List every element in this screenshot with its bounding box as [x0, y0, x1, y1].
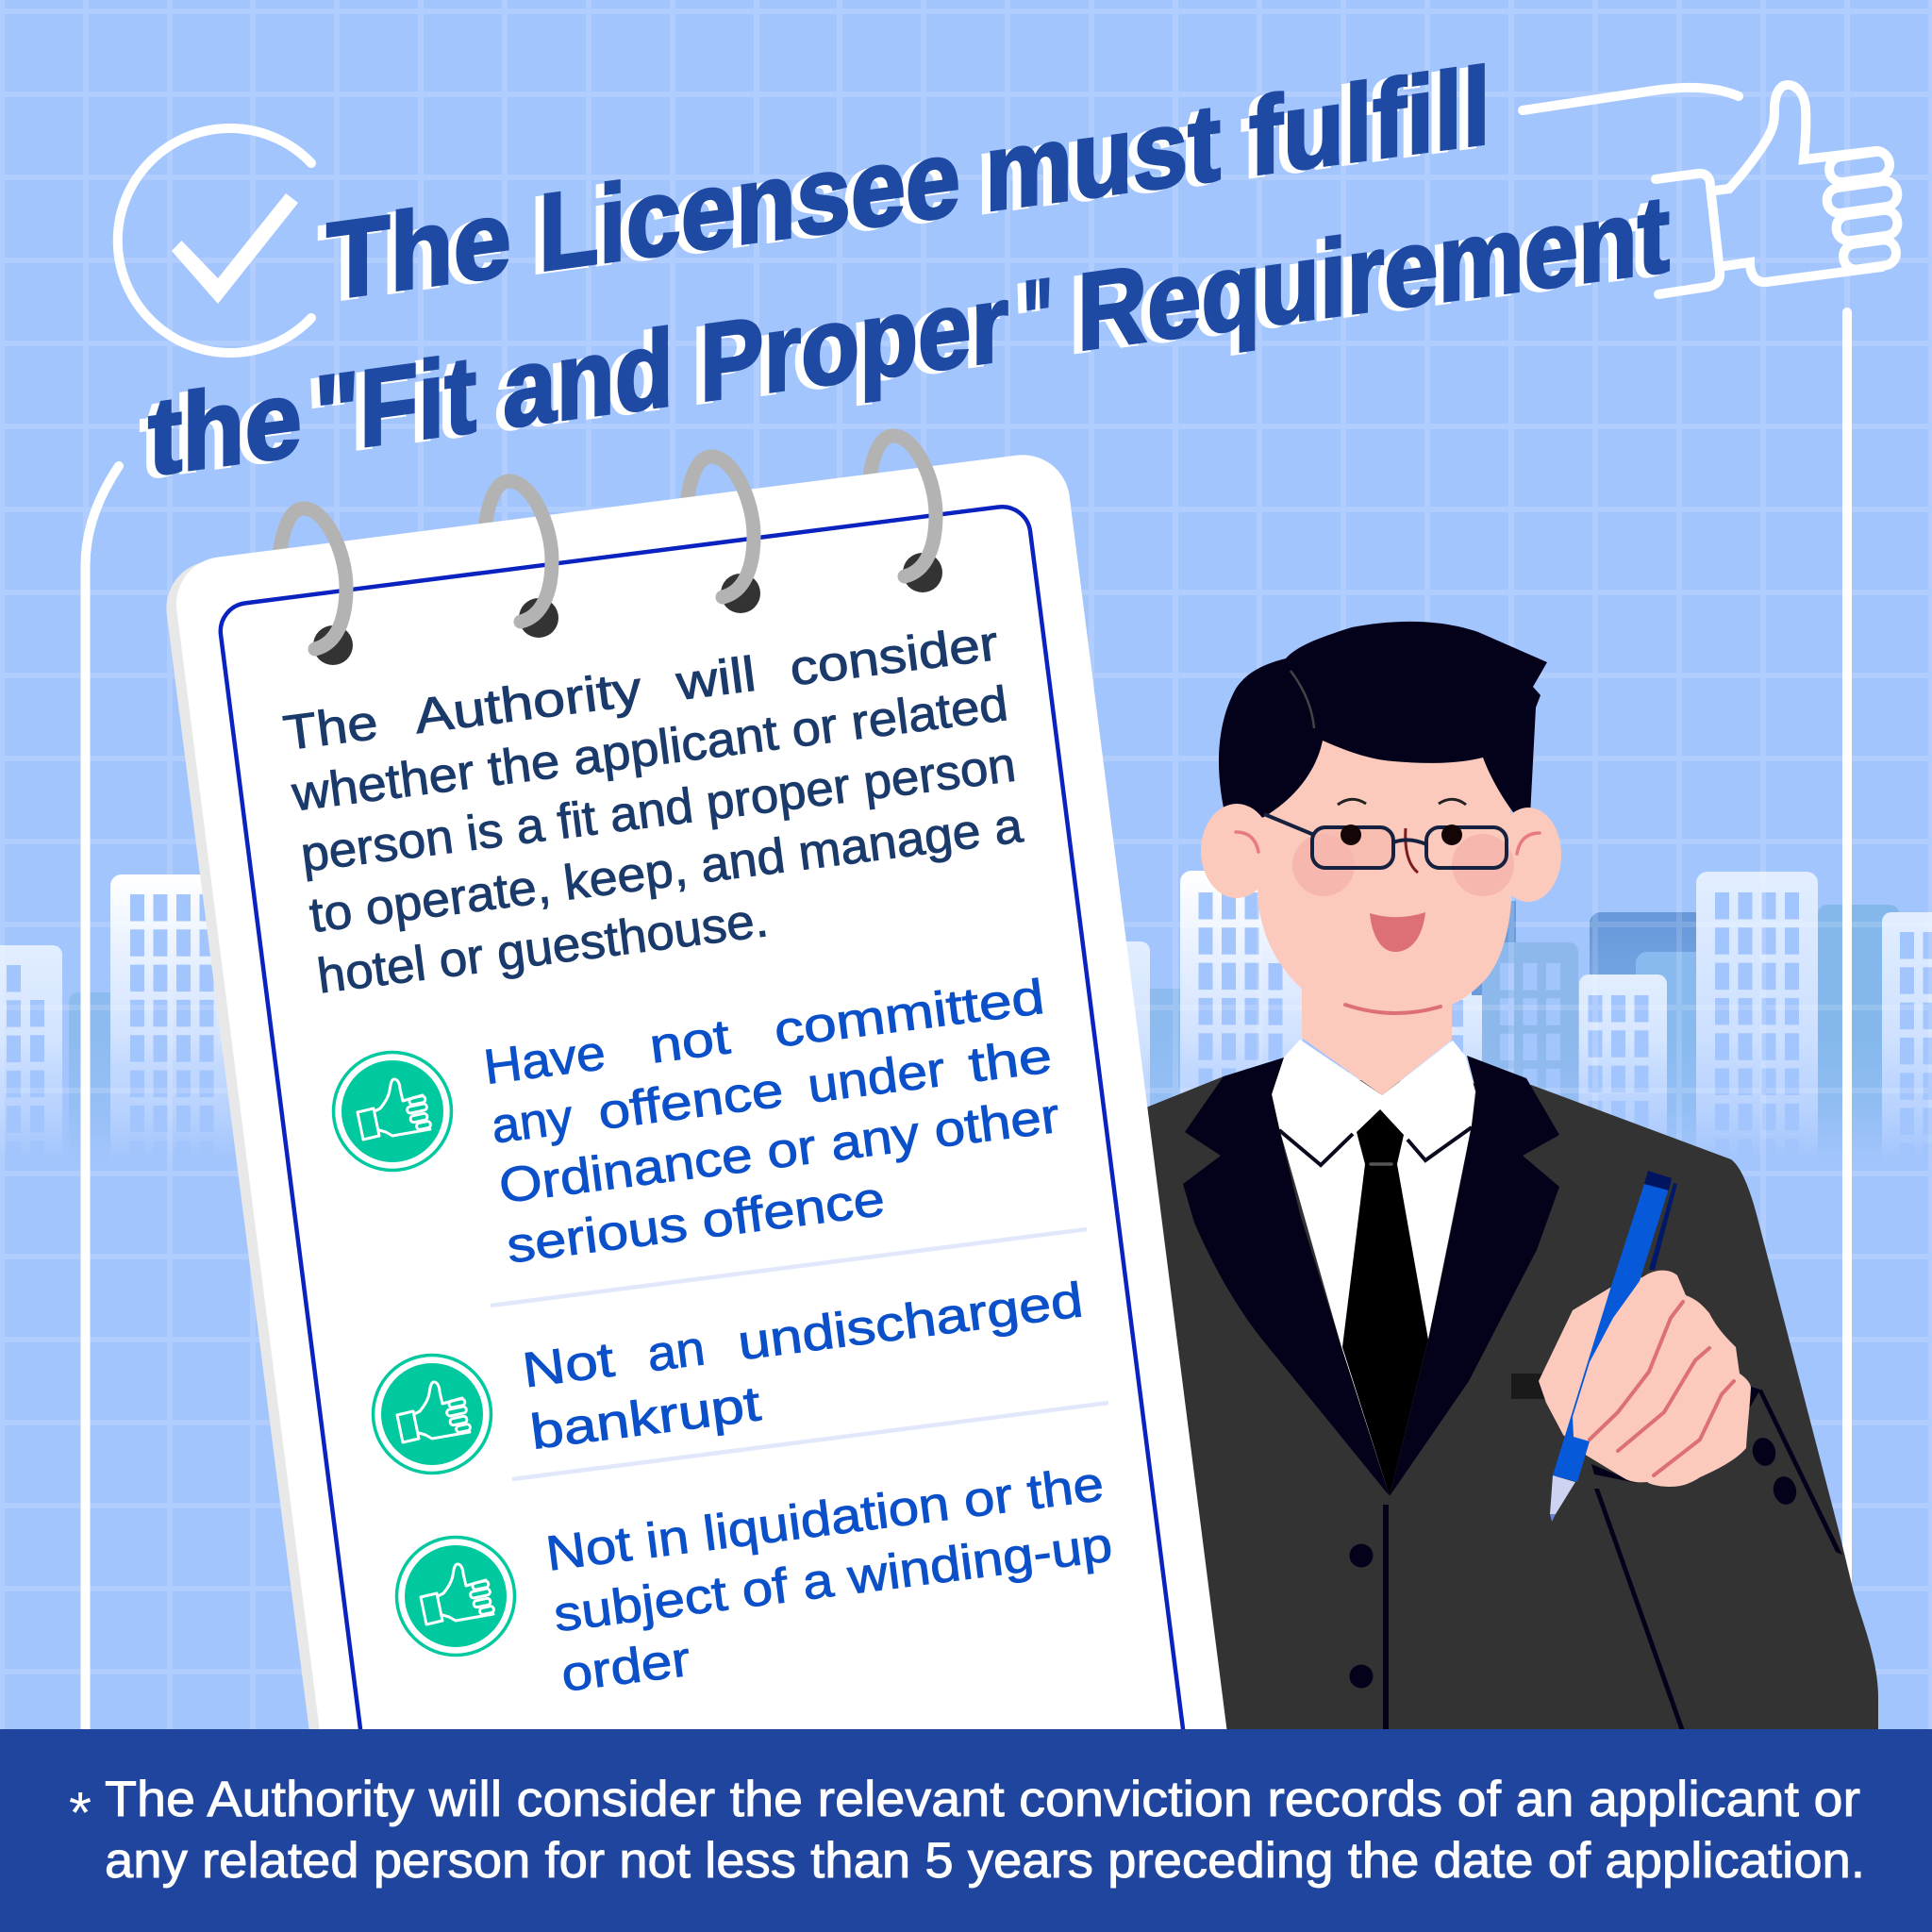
icon: check mark in circle [118, 128, 311, 353]
city skyline [0, 871, 1932, 1140]
left lapel [1183, 1058, 1390, 1496]
title: must [976, 84, 1212, 238]
hand [1539, 1271, 1751, 1487]
tie [1342, 1109, 1428, 1496]
item: no offence: any [489, 1090, 575, 1154]
item: not bankrupt: undischarged [735, 1273, 1086, 1371]
item: no offence: under [805, 1042, 948, 1114]
hair highlight [1291, 671, 1314, 728]
item: no offence: the [966, 1028, 1055, 1093]
right lapel [1390, 1056, 1559, 1496]
intro paragraph: to operate, keep, and manage a [307, 798, 1025, 943]
footer band [0, 1729, 1932, 1932]
item: not in liquidation [543, 1457, 1123, 1703]
item: no offence: Have [481, 1025, 608, 1095]
title: Licensee [530, 119, 952, 297]
title: Requirement [1077, 172, 1670, 374]
eyebrows [1338, 799, 1466, 805]
divider lines [491, 1229, 1108, 1479]
pen [1550, 1171, 1677, 1522]
ring 3 [711, 457, 760, 613]
title: The [318, 179, 503, 326]
title: " [1014, 258, 1044, 384]
intro paragraph: The [280, 695, 381, 761]
white frame lines [85, 312, 1847, 1736]
title: fulfill [1241, 47, 1482, 202]
item: not bankrupt [520, 1273, 1094, 1460]
item: no offence: not [646, 1009, 734, 1074]
finger lines [1590, 1302, 1734, 1475]
page shadow [160, 508, 798, 1896]
ring 2 [509, 481, 558, 638]
person [1113, 622, 1878, 1736]
intro paragraph: person is a fit and proper person [298, 738, 1019, 883]
intro paragraph [280, 616, 1034, 1005]
ring 1 [304, 508, 353, 665]
icon: thumbs up badge 3 [396, 1538, 515, 1655]
chin line [1345, 1005, 1441, 1013]
title: the [148, 356, 302, 499]
item: not in liquidation: subject of a winding-up [551, 1517, 1115, 1642]
ring 4 [893, 436, 942, 592]
item: no offence: Ordinance or any other [496, 1089, 1062, 1214]
title: the [140, 359, 293, 502]
icon: thumbs up badge 2 [374, 1355, 491, 1474]
nose [1406, 828, 1418, 873]
footnote: The Authority will consider the relevant conviction records of an applicant or [105, 1772, 1860, 1827]
intro paragraph: will [673, 647, 759, 711]
intro paragraph: hotel or guesthouse. [314, 892, 772, 1005]
item: not in liquidation: Not in liquidation or the [543, 1457, 1107, 1582]
notepad [160, 449, 1237, 1924]
hair [1219, 622, 1547, 821]
title [140, 44, 1670, 502]
item: no offence: committed [771, 970, 1047, 1058]
item: no offence [481, 970, 1070, 1274]
footnote [69, 1772, 1865, 1889]
item: no offence: serious offence [504, 1172, 888, 1274]
glasses [1264, 814, 1507, 868]
title: must [985, 80, 1221, 234]
spiral rings: front halves over the page [304, 436, 942, 665]
breast pocket [1511, 1374, 1549, 1399]
ears [1201, 804, 1561, 902]
title: " [1023, 255, 1053, 381]
item: no offence: offence [595, 1063, 787, 1141]
page [171, 449, 1233, 1892]
face and neck [1257, 717, 1511, 1095]
item: not in liquidation: order [558, 1632, 693, 1703]
intro paragraph: whether the applicant or related [288, 676, 1011, 823]
intro paragraph: consider [787, 616, 1001, 697]
footnote: any related person for not less than 5 years preceding the date of application. [105, 1833, 1865, 1889]
title: Licensee [539, 116, 960, 294]
page inner border [217, 504, 1193, 1917]
jacket [1113, 1076, 1878, 1736]
title: The [326, 176, 511, 323]
icon: large thumbs up outline [1523, 85, 1899, 294]
tie clip [1371, 1162, 1391, 1166]
item: not bankrupt: Not [520, 1333, 618, 1398]
icon: thumbs up badge 1 [334, 1053, 451, 1170]
eyes [1341, 824, 1462, 845]
collar lines [1279, 1127, 1472, 1165]
ear lines [1236, 832, 1540, 854]
title: Requirement [1069, 175, 1661, 376]
footnote: * [69, 1781, 92, 1846]
cheek blush [1292, 834, 1514, 896]
intro paragraph: Authority [411, 661, 645, 744]
item: not bankrupt: bankrupt [527, 1376, 764, 1460]
spiral rings: back halves behind the page [278, 436, 893, 566]
jacket buttons and seams [1349, 1385, 1842, 1736]
title: "Fit and Proper [314, 261, 1008, 476]
title: fulfill [1249, 44, 1491, 199]
item: not bankrupt: an [644, 1321, 708, 1383]
shirt [1272, 1040, 1475, 1496]
mouth [1370, 912, 1425, 952]
title: "Fit and Proper [306, 264, 1000, 479]
